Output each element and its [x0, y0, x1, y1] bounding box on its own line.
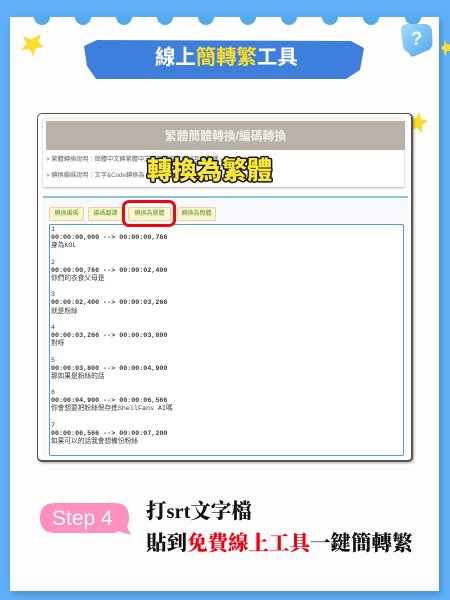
description line 2: > 轉換編碼說明：文字&Code轉換為 [46, 172, 145, 179]
grey page header: 繁體簡體轉換/編碼轉換 [165, 129, 286, 143]
step badge [40, 503, 131, 534]
step description: 貼到免費線上工具一鍵簡轉繁 [146, 533, 412, 555]
callout: convert to traditional: 轉換為繁體 [147, 157, 272, 185]
step description [146, 500, 412, 555]
icon: yellow star right edge [441, 39, 450, 57]
tool panel background [43, 198, 408, 458]
step description: 打srt文字檔 [146, 501, 252, 523]
red highlight box [122, 200, 176, 227]
button: encode: 轉換編碼 [54, 211, 78, 217]
description panel [43, 118, 404, 187]
blue divider [43, 196, 408, 198]
icon: yellow star behind frame [413, 112, 428, 133]
icon: question bubble: ? [411, 29, 422, 50]
scalloped top edge [34, 17, 421, 25]
button: encode [49, 207, 84, 221]
grey page header [46, 121, 405, 150]
button: to simplified [177, 207, 216, 221]
button: to simplified: 轉換為簡體 [181, 211, 212, 217]
button: to traditional [128, 207, 171, 221]
subtitle textarea [49, 224, 404, 456]
description line 1: > 繁體轉換說明：簡體中文轉繁體中文轉簡體中文進行互相翻譯。 [46, 156, 225, 163]
subtitle text: 1 00:00:00,000 --> 00:00:00,766 身為KOL 2 00:00:00,766 --> 00:00:02,400 你們的衣食父母是 3 00:00:02,400 --> 00:00:03,266 就是粉絲 4 00:00:03,266 --> 00:00:03,800 對呀 5 00:00:03,800 --> 00:00:04,900 那如果是粉絲的話 6 00:00:04,900 --> 00:00:06,566 你會想要把粉絲保存進ShellFans AI嗎 7 00:00:06,566 --> 00:00:07,200 如果可以的話我會想備份粉絲 [51, 226, 173, 446]
title banner [84, 40, 364, 79]
step label: Step 4 [52, 507, 113, 530]
heading: 線上簡轉繁工具 [155, 47, 298, 69]
screenshot frame [37, 113, 413, 462]
button: to traditional: 轉換為繁體 [134, 211, 164, 217]
icon: question bubble [401, 24, 432, 57]
button: decode: 編碼翻譯 [93, 211, 118, 217]
icon: yellow star left [21, 34, 44, 56]
button: decode [88, 207, 123, 221]
